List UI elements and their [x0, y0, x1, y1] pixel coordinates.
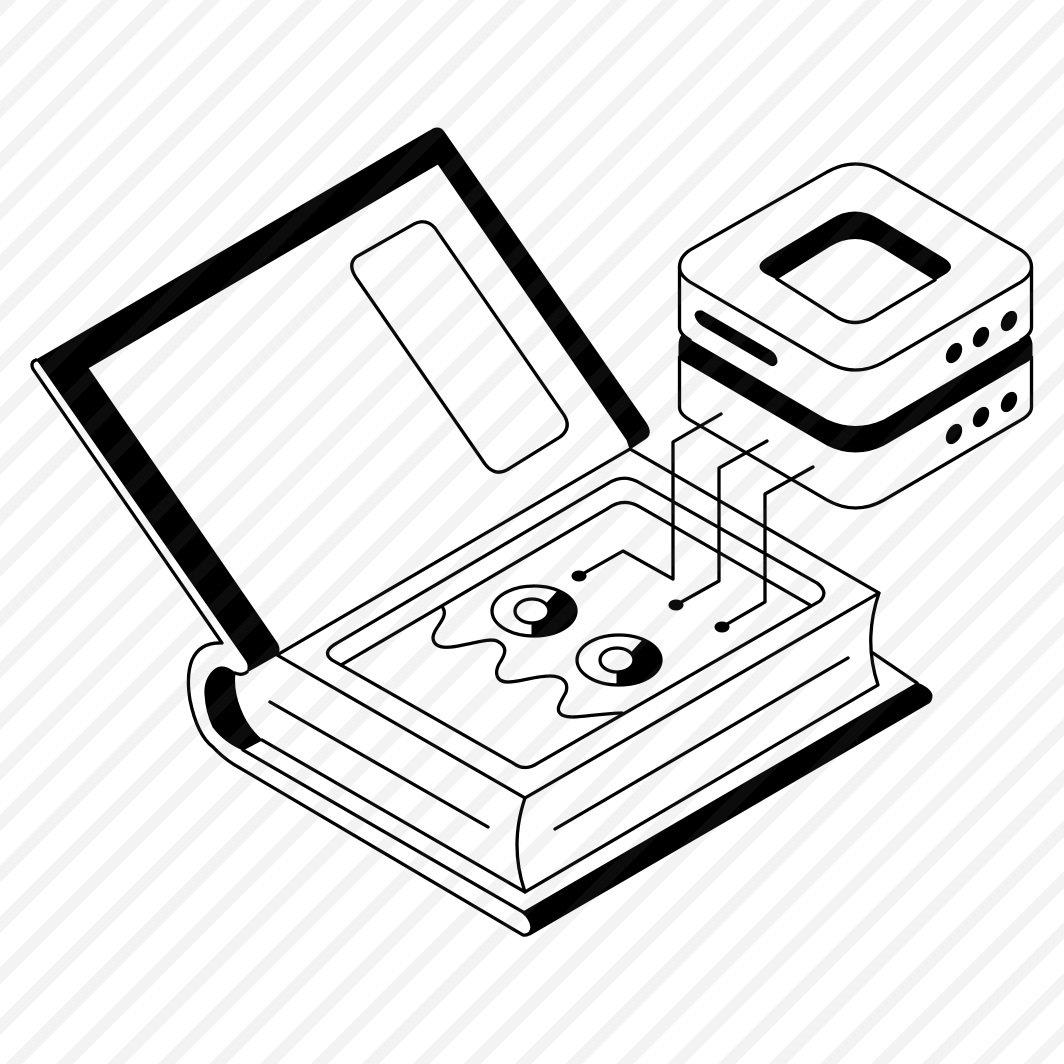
- page side line: [555, 658, 848, 829]
- page block: [262, 449, 879, 892]
- gauge 2: [577, 635, 661, 685]
- front cover: spine strip outline: [32, 360, 532, 935]
- page block spine bottom: [262, 740, 525, 892]
- gauge 2 inner ring: [600, 648, 634, 672]
- wire 3: [722, 467, 813, 627]
- wire 2 node: [668, 600, 684, 610]
- wire 1: [579, 414, 721, 579]
- wave line: [433, 608, 622, 717]
- screen frame on page: [328, 478, 824, 768]
- cover label panel: [352, 222, 567, 472]
- book: [32, 128, 932, 935]
- gauge 1 outer ring: [492, 586, 576, 636]
- screen inner edge: [341, 502, 810, 665]
- server screen lower edge: [777, 279, 935, 322]
- page block top outline: [277, 449, 879, 798]
- server stack: [679, 164, 1032, 508]
- server lower side: [680, 357, 1032, 508]
- gauge 1 inner ring: [515, 599, 549, 623]
- server slot: [695, 311, 777, 366]
- lower indicator dots: [942, 389, 1021, 447]
- gauge 2 outer ring: [577, 635, 661, 685]
- page edge curves: [517, 593, 879, 892]
- front cover: black frame: [36, 128, 649, 672]
- server upper side: [680, 267, 1032, 340]
- spine crescent: [205, 667, 262, 750]
- server top face: [680, 164, 1032, 370]
- server screen frame: [760, 212, 950, 280]
- gauge 2 black sector: [617, 640, 660, 685]
- connection wires: [572, 414, 813, 632]
- wire 2: [676, 441, 767, 605]
- wire 3 node: [714, 622, 730, 632]
- back cover rear edge: [873, 653, 917, 683]
- spine title line: [270, 702, 488, 827]
- hinge curl: [235, 672, 247, 674]
- back cover black edge: [523, 683, 932, 935]
- server black band: [679, 334, 1032, 452]
- gauge 1: [492, 586, 576, 636]
- back cover inner edge: [243, 750, 523, 912]
- wire 1 node: [572, 570, 586, 582]
- upper indicator dots: [942, 308, 1021, 366]
- gauge 1 black sector: [532, 591, 575, 636]
